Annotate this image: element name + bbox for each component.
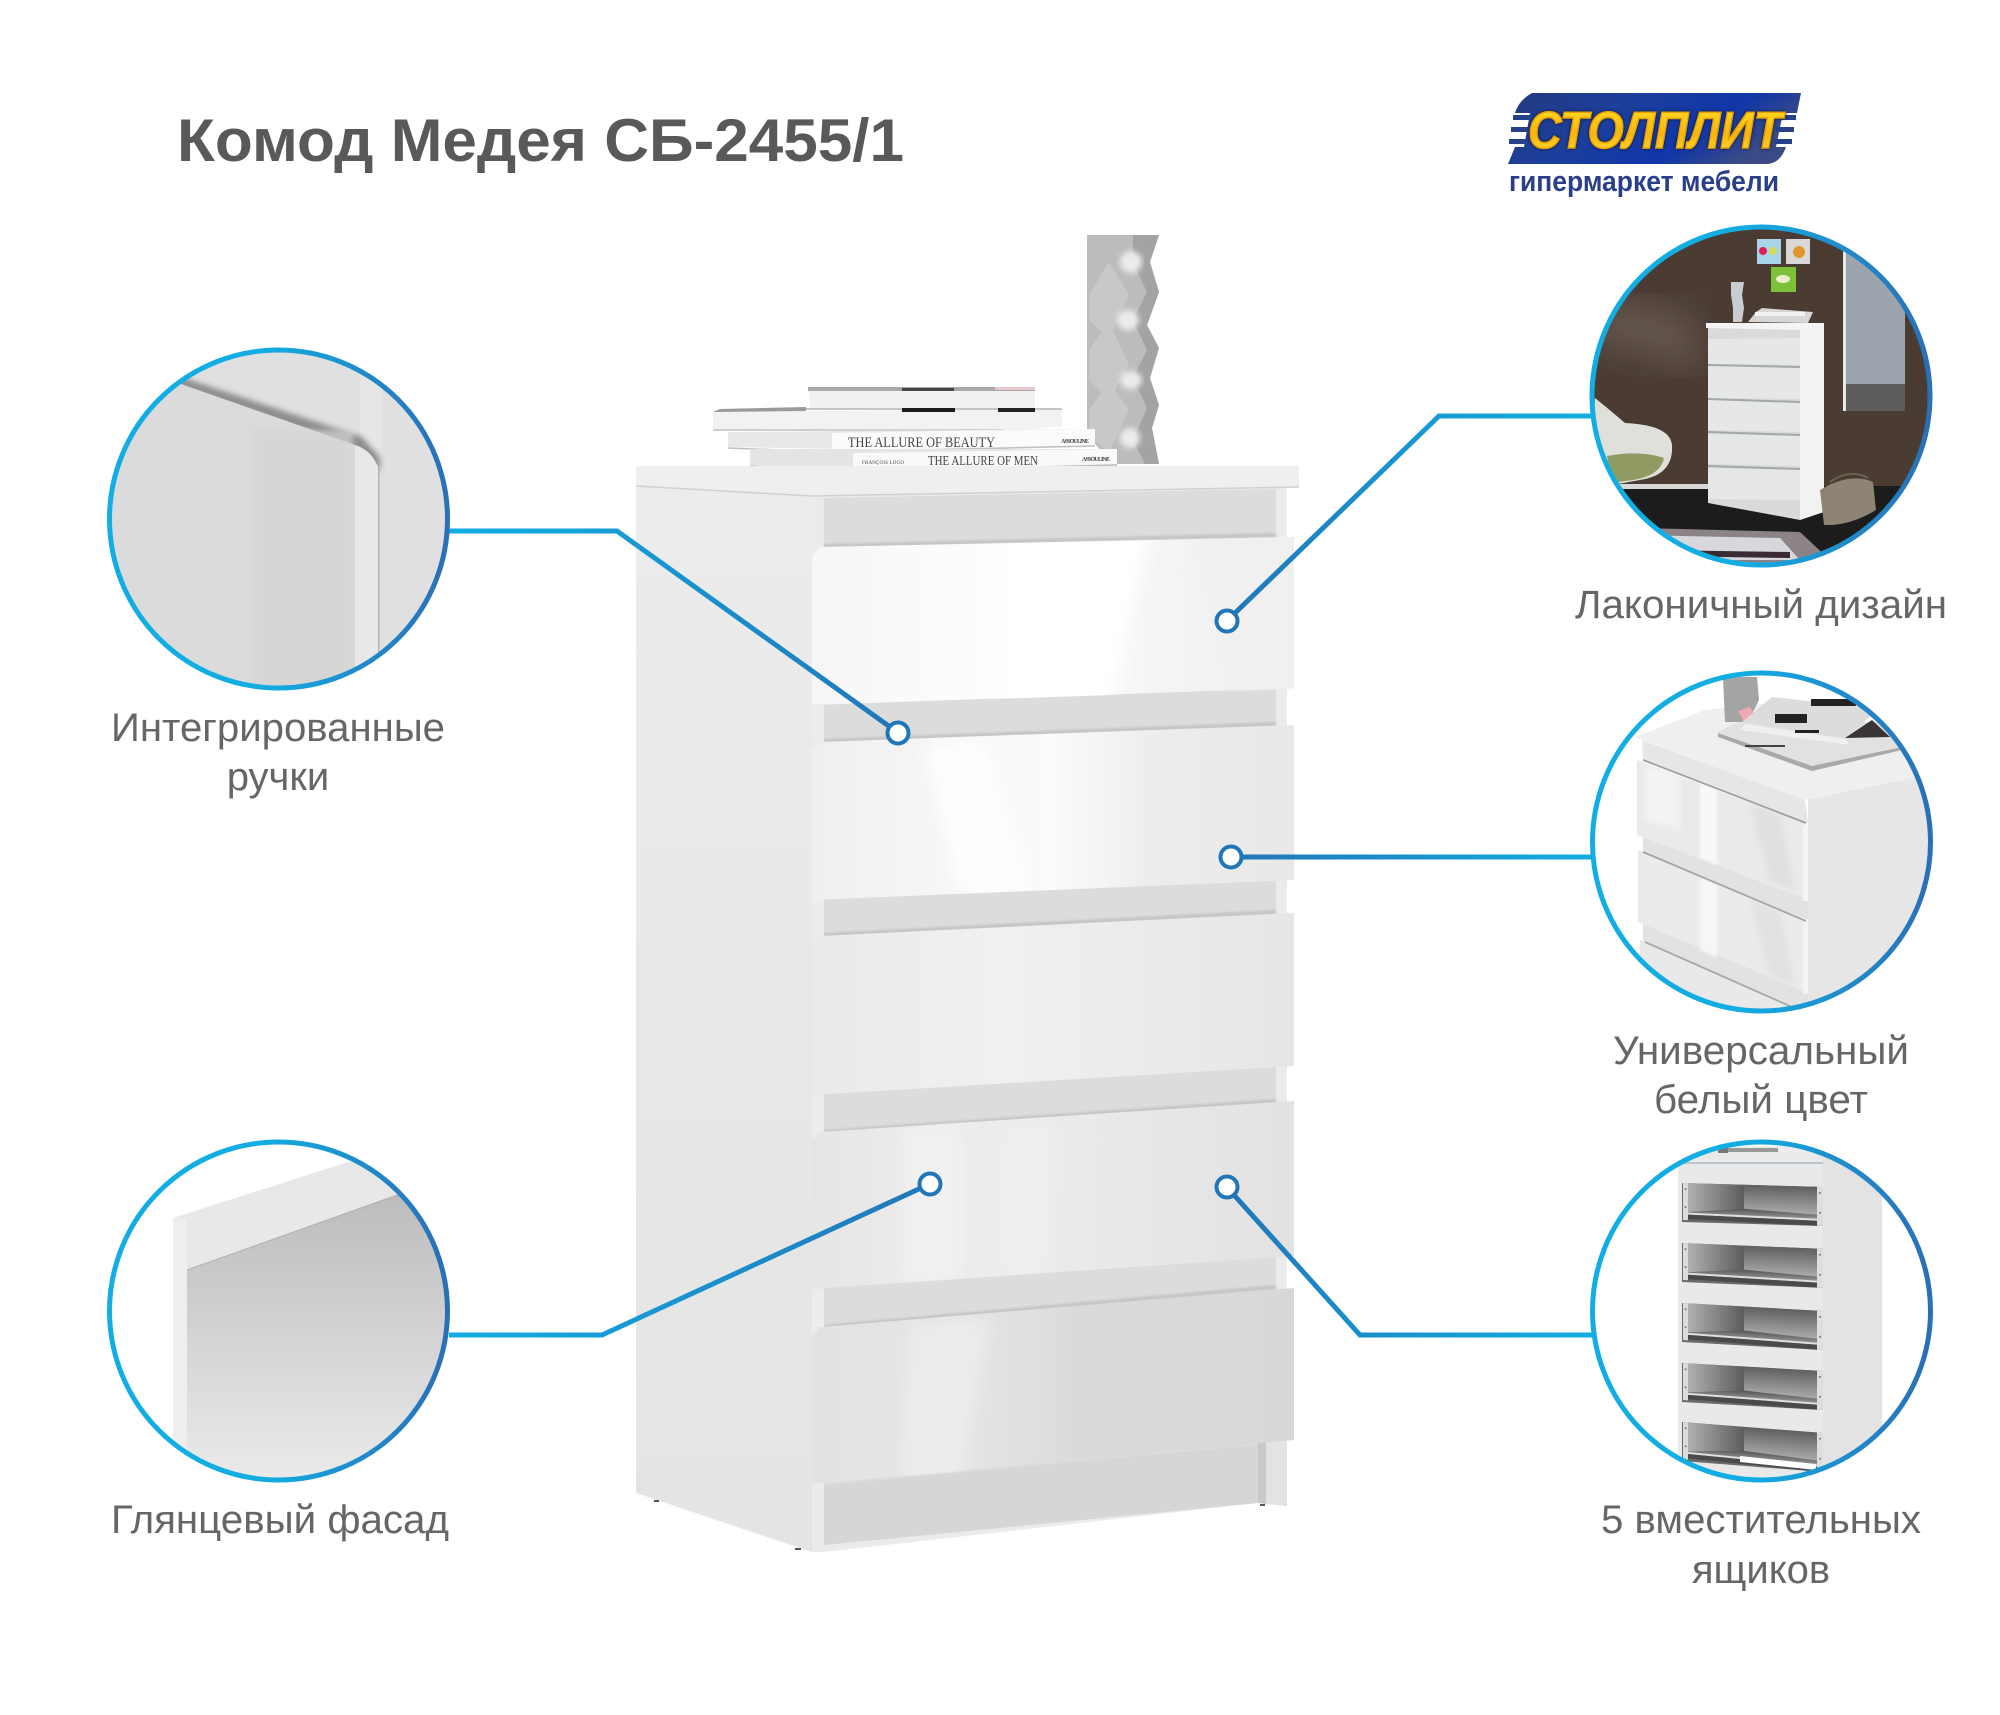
label: five drawers <box>1601 1498 1921 1592</box>
side of chest <box>1808 778 1928 1002</box>
label: integrated handles: Интегрированные <box>111 706 445 750</box>
bag <box>1820 478 1876 525</box>
marker dot: five drawers <box>1216 1176 1238 1198</box>
drawer 1 <box>1637 760 1808 900</box>
worktop <box>636 466 1299 496</box>
drawer 2 <box>812 725 1294 900</box>
label: integrated handles: ручки <box>227 755 329 799</box>
label: integrated handles <box>111 706 445 799</box>
circle: integrated handles <box>100 340 460 700</box>
vase <box>1087 235 1159 464</box>
title: Комод Медея СБ-2455/1 <box>177 107 904 174</box>
top surface <box>1636 704 1914 800</box>
front frame <box>812 487 1287 1552</box>
books <box>1723 677 1759 722</box>
label: five drawers: ящиков <box>1692 1548 1830 1592</box>
chair <box>1590 398 1672 485</box>
label: white colour: белый цвет <box>1654 1078 1868 1122</box>
book 1 <box>808 389 1035 410</box>
callout line: handles <box>449 531 890 727</box>
pictures <box>1757 239 1781 264</box>
books: THE ALLURE OF MEN <box>928 454 1038 469</box>
label: white colour: Универсальный <box>1613 1029 1909 1073</box>
marker dot: handles <box>888 722 908 744</box>
frame gaps <box>1643 835 1808 920</box>
chest of drawers <box>636 235 1299 1552</box>
frame under worktop <box>1642 740 1808 823</box>
drawer 2 <box>1638 850 1808 993</box>
drawer 1 <box>812 530 1294 710</box>
callout line: glossy facade <box>449 1188 921 1335</box>
plinth leg <box>1258 1440 1266 1504</box>
book 3 <box>728 429 1095 451</box>
label: five drawers: 5 вместительных <box>1601 1498 1921 1542</box>
books <box>713 387 1117 472</box>
drawer 4 <box>812 1101 1294 1289</box>
drawer shadows <box>824 533 1276 1329</box>
label: laconic design: Лаконичный дизайн <box>1575 583 1947 627</box>
callout line: five drawers <box>1234 1195 1592 1335</box>
books: THE ALLURE OF BEAUTY <box>848 435 995 451</box>
label: white colour <box>1613 1029 1909 1122</box>
drawer 5 <box>812 1288 1294 1484</box>
books: ASSOULINE <box>1082 457 1110 463</box>
circle: glossy facade <box>107 1140 450 1482</box>
marker dot: white colour <box>1220 846 1242 868</box>
feet <box>654 1500 1265 1550</box>
label: glossy facade: Глянцевый фасад <box>111 1498 449 1542</box>
book 2 <box>713 409 1062 432</box>
drawer 3 <box>1640 940 1778 1008</box>
logo: Столплит: СТОЛПЛИТ <box>1528 102 1786 160</box>
recess <box>824 489 1276 1485</box>
circle: white colour <box>1585 665 1945 1020</box>
callout line: white colour <box>1240 854 1592 860</box>
drawer 3 <box>812 913 1294 1095</box>
books: ASSOULINE <box>1061 439 1089 445</box>
callout line: laconic design <box>1234 416 1592 614</box>
logo: Столплит: гипермаркет мебели <box>1509 166 1779 198</box>
marker dot: laconic design <box>1216 610 1238 632</box>
circle: five drawers open <box>1585 1135 1945 1490</box>
small chest <box>1731 282 1744 322</box>
book 4 <box>750 449 1117 471</box>
side panel <box>636 484 812 1552</box>
plinth <box>824 1445 1258 1545</box>
books: FRANÇOIS LOGO <box>862 461 904 466</box>
logo: Столплит <box>1508 93 1801 198</box>
circle: laconic design interior photo <box>1585 220 1945 580</box>
marker dot: glossy facade <box>920 1174 940 1194</box>
